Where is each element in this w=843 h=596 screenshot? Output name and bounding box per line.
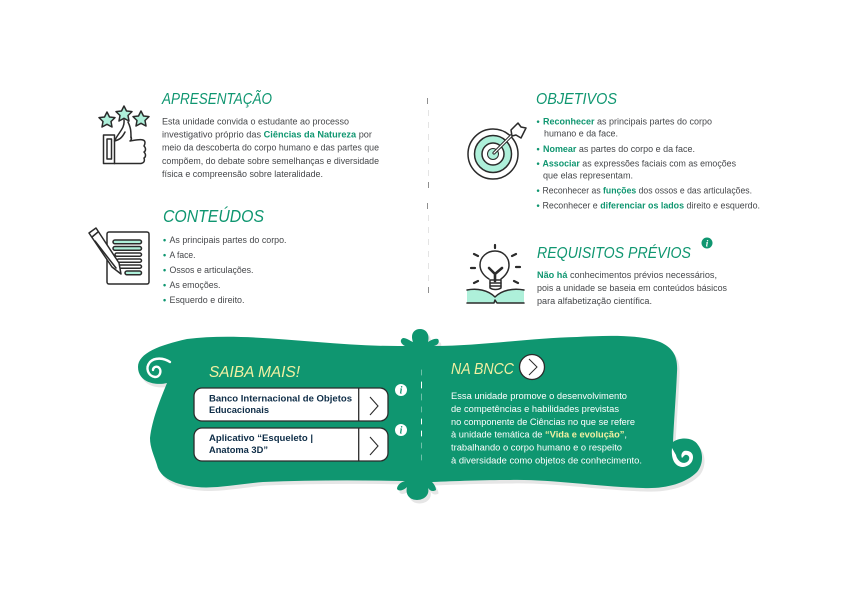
- text block: na bncc: à diversidade como objetos de conhecimento.: [451, 456, 642, 466]
- heading: apresentação: APRESENTAÇÃO: [161, 91, 272, 108]
- swirl: left: [148, 359, 170, 377]
- heading: requisitos prévios: REQUISITOS PRÉVIOS: [537, 245, 692, 262]
- card: aplicativo esqueleto: Aplicativo “Esqueleto |: [209, 433, 313, 444]
- text block: apresentação: física e compreensão sobre lateralidade.: [162, 169, 323, 179]
- banner shadow: [140, 332, 705, 504]
- card: banco internacional: [194, 388, 388, 421]
- list: objetivos: Associar as expressões faciais com as emoções: [542, 158, 736, 168]
- card: banco internacional: Banco Internacional de Objetos: [209, 394, 352, 404]
- heading: conteúdos: CONTEÚDOS: [163, 205, 264, 226]
- list: conteúdos: •: [163, 295, 166, 305]
- list: conteúdos: A face.: [170, 250, 196, 260]
- list: objetivos: Reconhecer as principais partes do corpo: [543, 116, 712, 126]
- text block: na bncc: no componente de Ciências no que se refere: [451, 417, 635, 427]
- list: conteúdos: Ossos e articulações.: [170, 265, 254, 275]
- text block: apresentação: meio da descoberta do corpo humano e das partes que: [162, 142, 379, 152]
- list: objetivos: Nomear as partes do corpo e da face.: [543, 144, 695, 154]
- list: objetivos: •: [536, 200, 540, 210]
- list: conteúdos: •: [163, 235, 166, 245]
- list: conteúdos: Esquerdo e direito.: [170, 295, 244, 305]
- list: conteúdos: •: [163, 250, 166, 260]
- list: objetivos: •: [536, 186, 540, 196]
- text block: requisitos: pois a unidade se baseia em conteúdos básicos: [537, 283, 727, 293]
- panel: green banner: [138, 329, 705, 504]
- panel: requisitos prévios: [467, 238, 727, 306]
- list: objetivos: •: [536, 116, 540, 126]
- icon: info: i: [400, 386, 403, 396]
- text block: na bncc: [451, 391, 642, 466]
- list: objetivos: [536, 116, 760, 210]
- list: objetivos: humano e da face.: [544, 128, 618, 138]
- text block: na bncc: à unidade temática de “Vida e evolução” ,: [451, 430, 627, 440]
- icon: document and pencil: [89, 228, 149, 284]
- panel: conteúdos: [89, 205, 286, 305]
- panel: apresentação: [99, 91, 379, 179]
- list: conteúdos: As emoções.: [170, 280, 220, 290]
- list: objetivos: •: [536, 158, 540, 168]
- icon: info: i: [400, 426, 403, 436]
- heading: na bncc: NA BNCC: [451, 361, 514, 378]
- list: objetivos: Reconhecer as funções dos ossos e das articulações.: [542, 186, 752, 196]
- list: objetivos: Reconhecer e diferenciar os lados direito e esquerdo.: [542, 200, 760, 210]
- text block: requisitos: Não há conhecimentos prévios necessários,: [537, 270, 717, 280]
- icon: info: [395, 424, 407, 436]
- list: conteúdos: •: [163, 280, 166, 290]
- card: aplicativo esqueleto: Anatoma 3D”: [209, 445, 268, 456]
- icon: target with arrow: [468, 123, 526, 179]
- text block: requisitos: para alfabetização científica.: [537, 296, 652, 306]
- heading: objetivos: OBJETIVOS: [536, 91, 618, 108]
- icon: arrow circle: [520, 354, 544, 380]
- icon: info: i: [706, 238, 709, 248]
- text block: na bncc: de competências e habilidades previstas: [451, 404, 620, 414]
- text block: na bncc: trabalhando o corpo humano e o respeito: [451, 442, 622, 452]
- text block: requisitos: [537, 270, 727, 306]
- icon: light bulb over open book: [467, 245, 524, 303]
- icon: info: [702, 238, 712, 248]
- card: banco internacional: Educacionais: [209, 405, 269, 416]
- text block: apresentação: compõem, do debate sobre semelhanças e diversidade: [162, 156, 379, 166]
- swirl: right: [672, 448, 693, 467]
- list: conteúdos: As principais partes do corpo.: [170, 235, 286, 245]
- card: aplicativo esqueleto: [194, 428, 388, 461]
- list: objetivos: •: [536, 144, 540, 154]
- list: conteúdos: [163, 235, 286, 305]
- banner body: [138, 329, 702, 500]
- list: objetivos: que elas representam.: [543, 170, 633, 180]
- text block: na bncc: Essa unidade promove o desenvolvimento: [451, 391, 627, 401]
- panel: objetivos: [468, 91, 760, 210]
- list: conteúdos: •: [163, 265, 166, 275]
- heading: saiba mais: SAIBA MAIS!: [209, 364, 301, 381]
- text block: apresentação: Esta unidade convida o estudante ao processo: [162, 116, 349, 126]
- icon: info: [395, 384, 407, 396]
- text block: apresentação: [162, 116, 379, 179]
- icon: thumbs up with stars: [99, 106, 149, 164]
- text block: apresentação: investigativo próprio das Ciências da Natureza por: [162, 130, 372, 140]
